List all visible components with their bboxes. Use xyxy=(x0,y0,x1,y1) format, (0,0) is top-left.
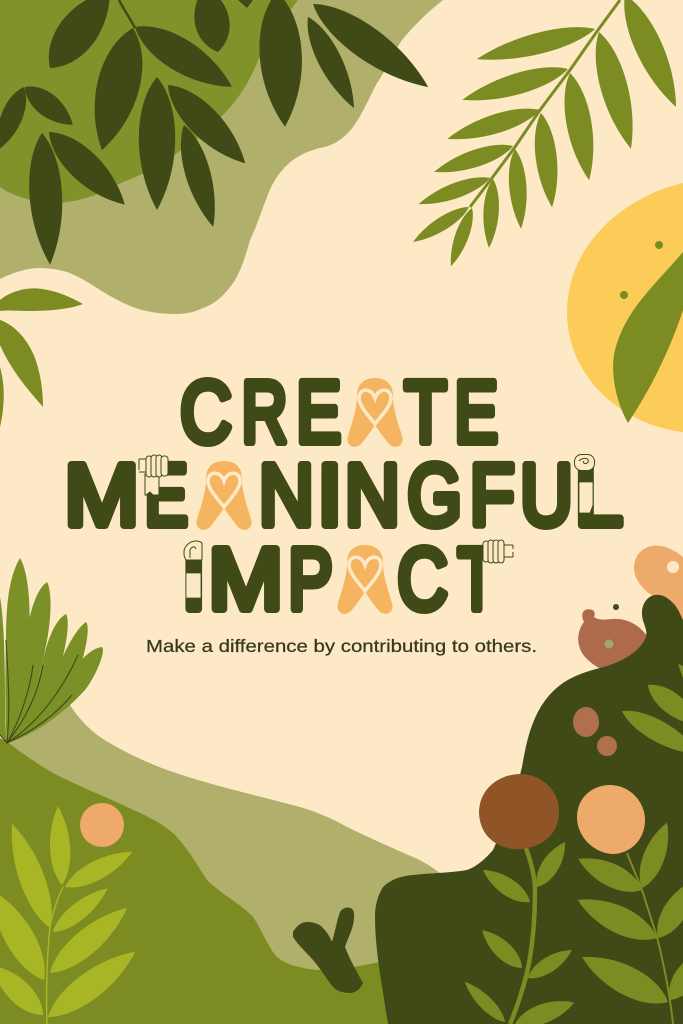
right stem plant xyxy=(572,819,683,1024)
peach blob top right xyxy=(634,545,683,640)
heart letter A: A xyxy=(208,466,244,522)
title line: CREATE: R xyxy=(242,364,288,461)
dark leaves branch xyxy=(0,0,438,266)
heart letter A: A xyxy=(349,550,385,606)
left palm plant xyxy=(0,558,103,743)
title line: IMPACT: T xyxy=(458,531,496,628)
title line: MEANINGFUL: L xyxy=(575,447,623,544)
peach flower head xyxy=(577,785,645,854)
heart letter A xyxy=(196,461,252,530)
title line: MEANINGFUL: N xyxy=(259,447,314,544)
heart letter A: A xyxy=(359,383,395,439)
title line: CREATE: E xyxy=(454,364,498,461)
title line: MEANINGFUL: U xyxy=(520,447,573,544)
title line: IMPACT: M xyxy=(208,531,283,628)
title line: CREATE xyxy=(180,364,498,461)
title line: MEANINGFUL xyxy=(64,447,623,544)
title line: MEANINGFUL: I xyxy=(317,447,342,544)
title line: IMPACT: P xyxy=(288,531,333,628)
title line: MEANINGFUL: E xyxy=(144,447,188,544)
title line: MEANINGFUL: M xyxy=(64,447,139,544)
fist on E xyxy=(139,455,168,495)
left edge olive leaves xyxy=(0,288,83,427)
brown flower head xyxy=(479,774,559,849)
title line: MEANINGFUL: N xyxy=(345,447,400,544)
title line: IMPACT: C xyxy=(397,531,448,628)
title line: IMPACT xyxy=(181,531,513,628)
heart letter A xyxy=(337,545,393,614)
title line: MEANINGFUL: G xyxy=(407,447,462,544)
subtitle: Make a difference by contributing to others. xyxy=(146,636,537,656)
dark sprout shape xyxy=(293,908,363,993)
upper olive leaves on dark blob xyxy=(617,664,683,764)
peach dot lower left xyxy=(80,803,124,847)
left stem plant xyxy=(460,837,577,1024)
top left sage blob xyxy=(0,0,443,314)
lime frond xyxy=(0,806,143,1024)
heart letter A xyxy=(347,378,403,447)
top right olive frond xyxy=(409,0,683,269)
bottom green hill xyxy=(0,738,390,1024)
title line: CREATE: C xyxy=(180,364,232,461)
title line: CREATE: T xyxy=(404,364,447,461)
brown blob xyxy=(578,604,650,669)
fist on I xyxy=(184,541,202,598)
fist on L xyxy=(574,454,594,513)
spots on dark blob xyxy=(573,707,617,756)
fist on T xyxy=(483,540,513,563)
dark blob bottom right xyxy=(375,595,683,1024)
bottom sage wave xyxy=(0,702,440,1024)
top left green circle xyxy=(0,0,298,203)
title line: IMPACT: I xyxy=(181,531,206,628)
title line: CREATE: E xyxy=(296,364,341,461)
title line: MEANINGFUL: F xyxy=(470,447,515,544)
title xyxy=(64,364,623,656)
yellow blob with leaf xyxy=(567,183,683,432)
